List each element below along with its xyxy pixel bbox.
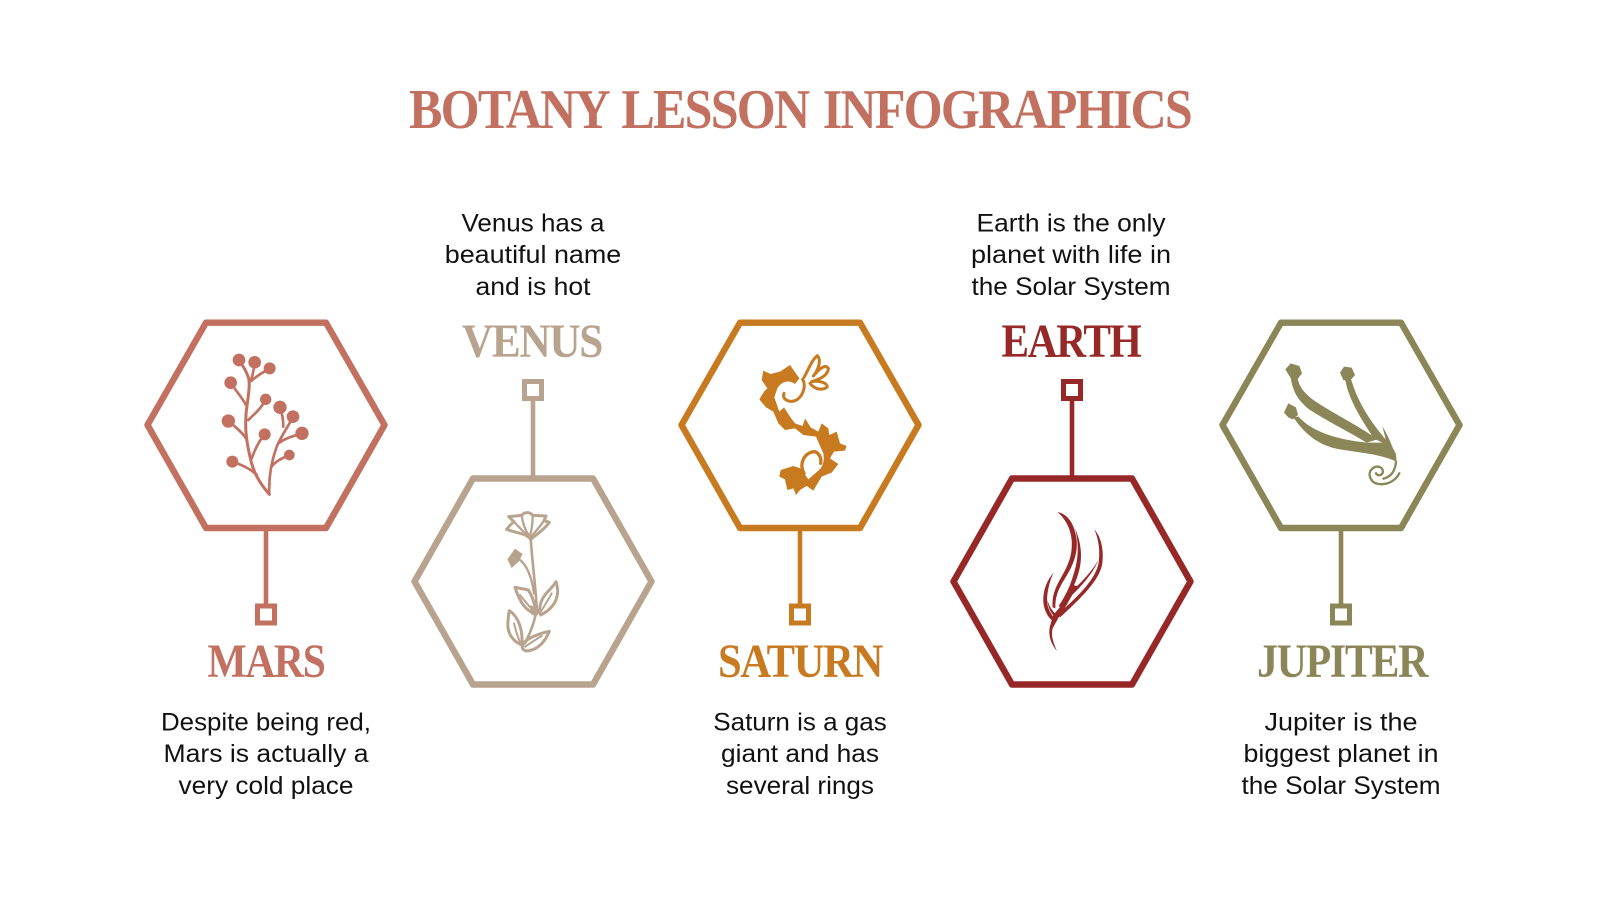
Saturn connector [792,530,808,623]
Earth description: Earth is the only [976,210,1166,238]
Jupiter description: the Solar System [1242,772,1440,800]
icon: outlined flower [507,513,558,651]
Mars hexagon [148,323,384,528]
Venus name: VENUS [462,315,602,368]
Earth connector [1064,382,1080,476]
Mars description: very cold place [178,772,354,800]
panel: Saturn [682,323,918,800]
icon: curling vine [759,356,847,495]
panel: Mars [148,323,384,800]
Saturn description [713,708,887,800]
icon: seaweed frond [1043,512,1103,651]
Mars description [161,708,371,800]
Venus connector [524,382,542,476]
title: BOTANY LESSON INFOGRAPHICS [409,79,1191,141]
icon: berry branch [222,354,309,494]
Venus description: and is hot [476,273,591,301]
Jupiter description: Jupiter is the [1264,708,1418,736]
Earth name: EARTH [1002,315,1141,368]
Saturn description: Saturn is a gas [713,708,887,736]
panel: Jupiter [1222,323,1460,800]
Jupiter description [1242,708,1440,800]
Mars connector [258,530,274,623]
Saturn name: SATURN [718,635,884,688]
Mars name: MARS [208,635,324,688]
Earth description: planet with life in [971,241,1171,269]
Venus description: beautiful name [445,241,621,269]
Saturn hexagon [682,323,918,528]
Jupiter connector [1332,530,1350,623]
Earth description: the Solar System [972,273,1170,301]
Jupiter description: biggest planet in [1244,740,1438,768]
Earth hexagon [954,478,1190,684]
Earth description [971,210,1171,301]
Saturn description: giant and has [721,740,879,768]
Venus hexagon [414,478,652,684]
Jupiter hexagon [1222,323,1460,528]
panel: Venus [414,210,652,684]
Venus description: Venus has a [462,210,605,238]
Mars description: Mars is actually a [164,740,369,768]
Saturn description: several rings [726,772,874,800]
Jupiter name: JUPITER [1257,635,1429,688]
panel: Earth [954,210,1190,684]
Venus description [445,210,621,301]
Mars description: Despite being red, [161,708,371,736]
icon: tulip stems [1284,363,1399,484]
